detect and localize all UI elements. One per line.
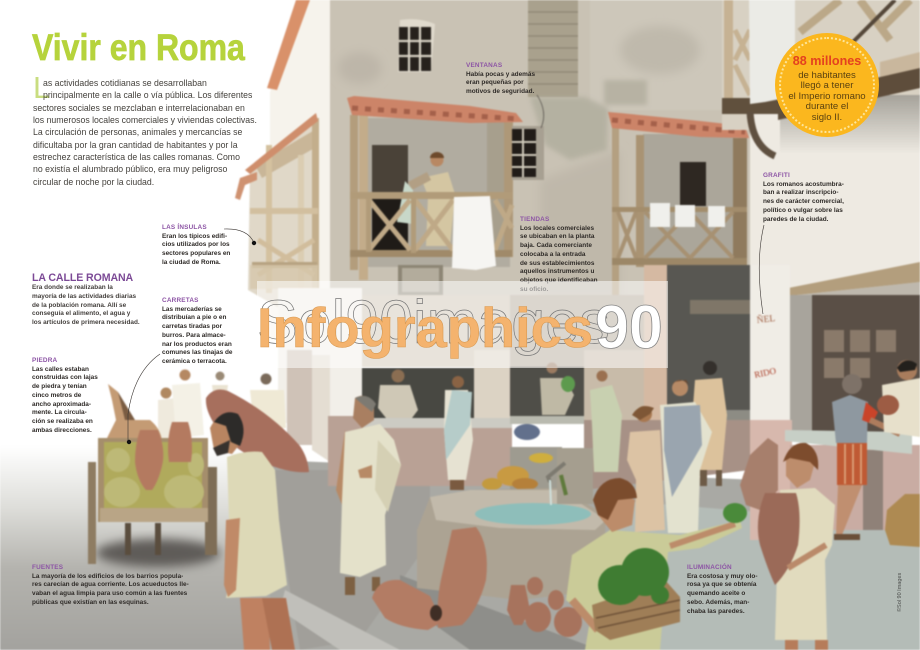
ventanas leader line	[537, 95, 544, 128]
leader line: carretas	[126, 354, 160, 444]
text: grafiti: ban a realizar inscripcio-	[763, 189, 838, 196]
text: piedra: cinco metros de	[32, 392, 81, 399]
intro text: circular de noche por la ciudad.	[33, 177, 154, 187]
brick patches	[528, 0, 850, 269]
text: tiendas: TIENDAS	[520, 216, 549, 223]
laundry	[650, 203, 725, 227]
text: grafiti: Los romanos acostumbra-	[763, 181, 844, 188]
text: piedra: mente. La circula-	[32, 409, 87, 416]
text: tiendas: colocaba a la entrada	[520, 251, 585, 258]
callout: 88 millones badge: el Imperio romano	[788, 91, 866, 102]
bag	[885, 494, 920, 547]
text: carretas: nar los productos eran	[162, 341, 232, 348]
balcony one	[347, 96, 523, 295]
soldier	[832, 374, 900, 540]
ground floor left white wall	[278, 288, 512, 486]
upper right building	[722, 0, 920, 310]
text: piedra: ción se realizaba en	[32, 418, 93, 425]
text: carretas	[162, 297, 232, 365]
intro text: no existía el alumbrado público, era muy peligroso	[33, 164, 227, 174]
balcony left	[235, 113, 319, 330]
right shop front: RIDO	[753, 365, 777, 380]
text: carretas: cerámica o terracota.	[162, 358, 227, 365]
cart and donkey	[88, 384, 217, 564]
intro text: dificultaba por la gran cantidad de habitantes y por la	[33, 140, 238, 150]
text: grafiti: nes de carácter comercial,	[763, 198, 844, 205]
text: fuentes: res carecían de agua corriente. Los acueductos lle-	[32, 581, 189, 588]
text: fuentes: vaban el agua limpia para uso común a las fuentes	[32, 590, 187, 597]
text: tiendas: objetos que identificaban	[520, 277, 598, 284]
section: la calle romana: conseguía el alimento, el agua y	[32, 310, 130, 317]
text: piedra: construidas con lajas	[32, 374, 98, 381]
intro text: los numerosos locales comerciales y viviendas colectivas.	[33, 115, 257, 125]
street floor	[0, 445, 920, 650]
text: fuentes	[32, 564, 189, 606]
text: las ínsulas: la ciudad de Roma.	[162, 259, 221, 266]
text: carretas: burros. Para almace-	[162, 332, 226, 339]
right shop front	[750, 295, 920, 540]
fruit stall	[482, 424, 562, 490]
text: fuentes: La mayoría de los edificios de los barrios popula-	[32, 573, 183, 580]
text: ventanas: VENTANAS	[466, 62, 502, 69]
title: Vivir en Roma	[32, 27, 245, 68]
text: iluminación: Era costosa y muy olo-	[687, 573, 757, 580]
section: la calle romana: de la población romana. Allí se	[32, 302, 126, 309]
standing amphora back	[740, 438, 778, 510]
section: la calle romana	[32, 272, 140, 326]
intro text: as actividades cotidianas se desarrollaban	[43, 78, 207, 88]
callout: 88 millones badge: siglo II.	[812, 112, 842, 123]
man behind counter	[877, 360, 920, 437]
leader line: grafiti	[758, 224, 764, 314]
callout: 88 millones badge	[775, 33, 879, 137]
second window	[512, 126, 544, 180]
text: tiendas: aquellos instrumentos u	[520, 268, 594, 275]
boy with amphora	[758, 443, 835, 650]
text: ventanas: motivos de seguridad.	[466, 88, 534, 95]
graffiti: ÑEL	[756, 312, 776, 326]
text: iluminación	[687, 563, 758, 615]
text: ventanas: eran pequeñas por	[466, 79, 524, 86]
shop people	[378, 362, 575, 490]
section: la calle romana: los artículos de primera necesidad.	[32, 319, 140, 326]
text: tiendas: baja. Cada comerciante	[520, 242, 592, 249]
intro text: principalmente en la calle o vía pública. Los diferentes	[43, 90, 252, 100]
credit: ©Sol 90 Images	[897, 573, 903, 612]
greens	[598, 503, 747, 605]
intro text: La circulación de personas, animales y mercancías se	[33, 127, 242, 137]
text: las ínsulas	[162, 223, 230, 266]
balcony right	[608, 112, 749, 298]
callout: 88 millones badge: de habitantes	[798, 70, 856, 81]
lying amphorae	[372, 527, 487, 630]
pedestrians centre	[590, 361, 727, 533]
text: grafiti: paredes de la ciudad.	[763, 216, 828, 223]
text: iluminación: chaba las paredes.	[687, 608, 745, 615]
boy with basket	[566, 478, 747, 650]
text: grafiti	[763, 172, 844, 223]
text: piedra	[32, 357, 98, 434]
upper window	[398, 19, 435, 72]
text: piedra: ambas direcciones.	[32, 427, 92, 434]
text: iluminación: quemando aceite o	[687, 590, 745, 597]
watermark	[257, 281, 668, 368]
text: tiendas: su oficio.	[520, 286, 548, 293]
text: tiendas: se ubicaban en la planta	[520, 233, 594, 240]
text: las ínsulas: cios utilizados por los	[162, 241, 230, 248]
text: piedra: Las calles estaban	[32, 366, 89, 373]
drop cap: L	[33, 70, 50, 105]
crate	[592, 580, 680, 640]
callout: 88 millones badge: durante el	[806, 101, 848, 112]
text: las ínsulas: Eran los típicos edifi-	[162, 233, 227, 240]
watermark: Infographics	[257, 296, 593, 359]
woman on balcony	[397, 152, 455, 246]
hanging sheet	[452, 196, 496, 270]
pots	[507, 577, 582, 637]
man in toga	[336, 396, 401, 595]
text: piedra: ancho aproximada-	[32, 401, 91, 408]
text: carretas: distribuían a pie o en	[162, 314, 226, 321]
tile roof	[347, 96, 523, 123]
section: la calle romana: Era donde se realizaban la	[32, 284, 113, 291]
text: las ínsulas: LAS ÍNSULAS	[162, 224, 207, 231]
left white side wall	[267, 0, 332, 340]
text: carretas: CARRETAS	[162, 297, 199, 304]
text: iluminación: ILUMINACIÓN	[687, 564, 732, 571]
text: fuentes: públicas que existían en las esquinas.	[32, 599, 149, 606]
text: carretas: carretas tiradas por	[162, 323, 222, 330]
text: iluminación: sebo. Además, man-	[687, 599, 749, 606]
text: carretas: comunes las tinajas de	[162, 349, 232, 356]
main building wall	[330, 0, 750, 365]
shop openings	[362, 265, 790, 490]
people behind cart	[158, 370, 286, 440]
man carrying amphora	[206, 390, 309, 650]
text: tiendas: Los locales comerciales	[520, 225, 594, 232]
text: carretas: Las mercaderías se	[162, 306, 222, 313]
leader line: ínsulas	[224, 228, 256, 246]
intro text: estrechez característica de las calles romanas. Como	[33, 152, 240, 162]
callout: 88 millones badge: 88 millones	[793, 54, 861, 68]
text: tiendas	[520, 216, 598, 293]
text: iluminación: rosa ya que se obtenía	[687, 581, 756, 588]
text: tiendas: de sus establecimientos	[520, 260, 594, 267]
intro text: sectores sociales se mezclaban e interrelacionaban en	[33, 103, 245, 113]
cart jars	[135, 422, 192, 490]
text: grafiti: político o vulgar sobre las	[763, 207, 843, 214]
section: la calle romana: LA CALLE ROMANA	[32, 272, 133, 284]
section: la calle romana: mayoría de las actividades diarias	[32, 293, 136, 300]
text: ventanas	[466, 62, 535, 95]
text: fuentes: FUENTES	[32, 564, 63, 571]
text: piedra: PIEDRA	[32, 357, 57, 364]
watermark: 90	[595, 293, 663, 361]
text: grafiti: GRAFITI	[763, 172, 790, 179]
text: las ínsulas: sectores populares en	[162, 250, 230, 257]
fountain	[417, 448, 606, 600]
text: piedra: de piedra y tenían	[32, 383, 87, 390]
shadow under cart	[96, 539, 220, 567]
callout: 88 millones badge: llegó a tener	[801, 80, 853, 91]
text: ventanas: Había pocas y además	[466, 71, 535, 78]
intro text	[33, 78, 257, 187]
